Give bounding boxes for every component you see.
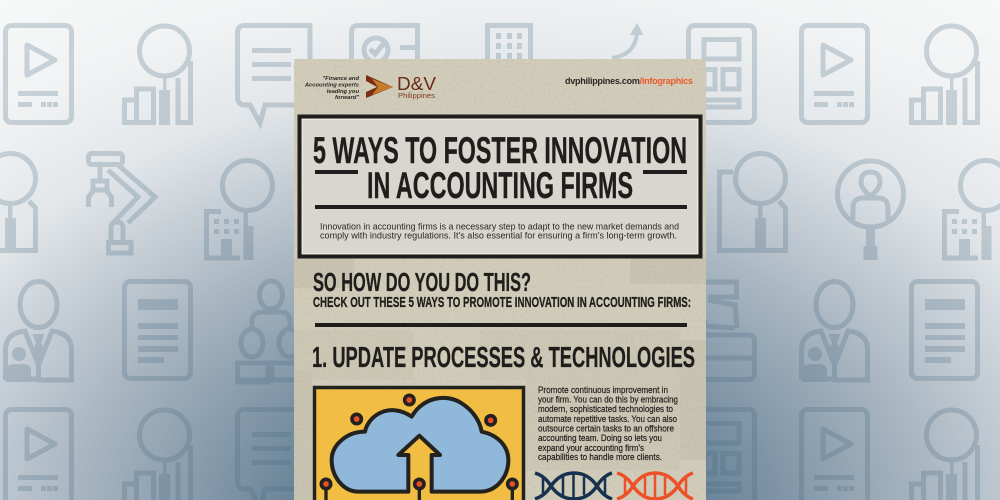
heading: update processes and technologies: 1. UPDATE PROCESSES & TECHNOLOGIES [312,342,695,374]
intro text [320,222,679,242]
paper grain [294,59,706,500]
icon: check document [352,26,418,62]
icon: video document row 1 left [6,26,72,122]
icon: orange DNA helix [617,473,693,499]
intro text: Innovation in accounting firms is a necessary step to adapt to the new market demands and [320,222,679,232]
header: tagline: leading you [327,89,359,95]
icon: robot arm [88,154,155,253]
logo: D&amp;V Philippines [366,73,437,100]
header: tagline: Accounting experts [304,82,360,88]
icon: stacked books and hand [700,282,754,380]
icon: magnifier chart row 1 [124,26,190,125]
header: tagline: "Finance and [322,76,359,82]
section 1 body text: expand your accounting firm's [538,443,644,453]
header: tagline [304,76,360,101]
circuit lines [326,484,512,500]
section 1 body text [538,385,678,462]
section heading: so how do you do this: SO HOW DO YOU DO THIS? [313,267,531,297]
icon: video document row 4 right [802,410,868,500]
infographic paper panel [294,59,706,500]
title rules [315,170,687,209]
icon: magnifier chart row 4 [124,410,190,500]
title text: 5 WAYS TO FOSTER INNOVATION [313,130,687,171]
icon: office building [488,26,530,62]
cloud shape with arrow [332,398,508,492]
section 1 body text: modern, sophisticated technologies to [538,404,673,414]
header: website url: dvphilippines.com/infographics [565,76,693,86]
icon: magnifier building right [944,160,1000,260]
icon: speech bubble row 4 [238,410,310,500]
icon: presenter group [238,281,306,382]
section heading: so how do you do this: CHECK OUT THESE 5 WAYS TO PROMOTE INNOVATION IN ACCOUNTING FIRMS: [313,294,691,311]
icon: video document row 4 left [6,410,72,500]
illustration: cloud upload [314,388,524,500]
icon: magnifier document right [720,154,786,253]
title panel [300,116,700,256]
section divider [315,323,687,327]
logo: D&amp;V Philippines: D&V [397,73,437,94]
title text: IN ACCOUNTING FIRMS [367,165,633,206]
intro text: comply with industry regulations. It's also essential for ensuring a firm's long-term growth. [320,230,677,242]
icon: person with portrait right [802,282,868,382]
section 1 body text: Promote continuous improvement in [538,385,668,395]
circuit nodes [321,395,517,489]
icon: magnifier chart row 1 right [912,26,978,125]
icon: person with portrait left [6,282,72,382]
newspaper collage patches [294,258,706,500]
icon: text document row 3 right [912,282,978,378]
icon: person in magnifier [838,161,904,260]
icon: magnifier chart row 4 right [912,410,978,500]
icon: text document row 3 [124,282,190,378]
section 1 body text: accounting team. Doing so lets you [538,433,662,443]
section 1 body text: outsource certain tasks to an offshore [538,424,674,434]
section 1 body text: capabilities to handle more clients. [538,452,662,462]
icon: layout document row 4 [688,410,754,500]
header: tagline: forward" [335,95,359,101]
icon: navy DNA helix [535,473,612,499]
section heading: so how do you do this [313,267,691,311]
logo: D&amp;V Philippines: Philippines [398,91,435,100]
icon: video document row 1 right [802,26,868,122]
title text [313,130,687,206]
icon: magnifier building [206,160,272,260]
icon: growth arrow [612,23,644,58]
section 1 body text: your firm. You can do this by embracing [538,394,678,404]
icon: speech bubble row 1 [238,26,310,123]
section 1 body text: automate repetitive tasks. You can also [538,414,677,424]
icon: magnifier document left [0,154,36,253]
icon: layout document row 1 [688,26,754,122]
